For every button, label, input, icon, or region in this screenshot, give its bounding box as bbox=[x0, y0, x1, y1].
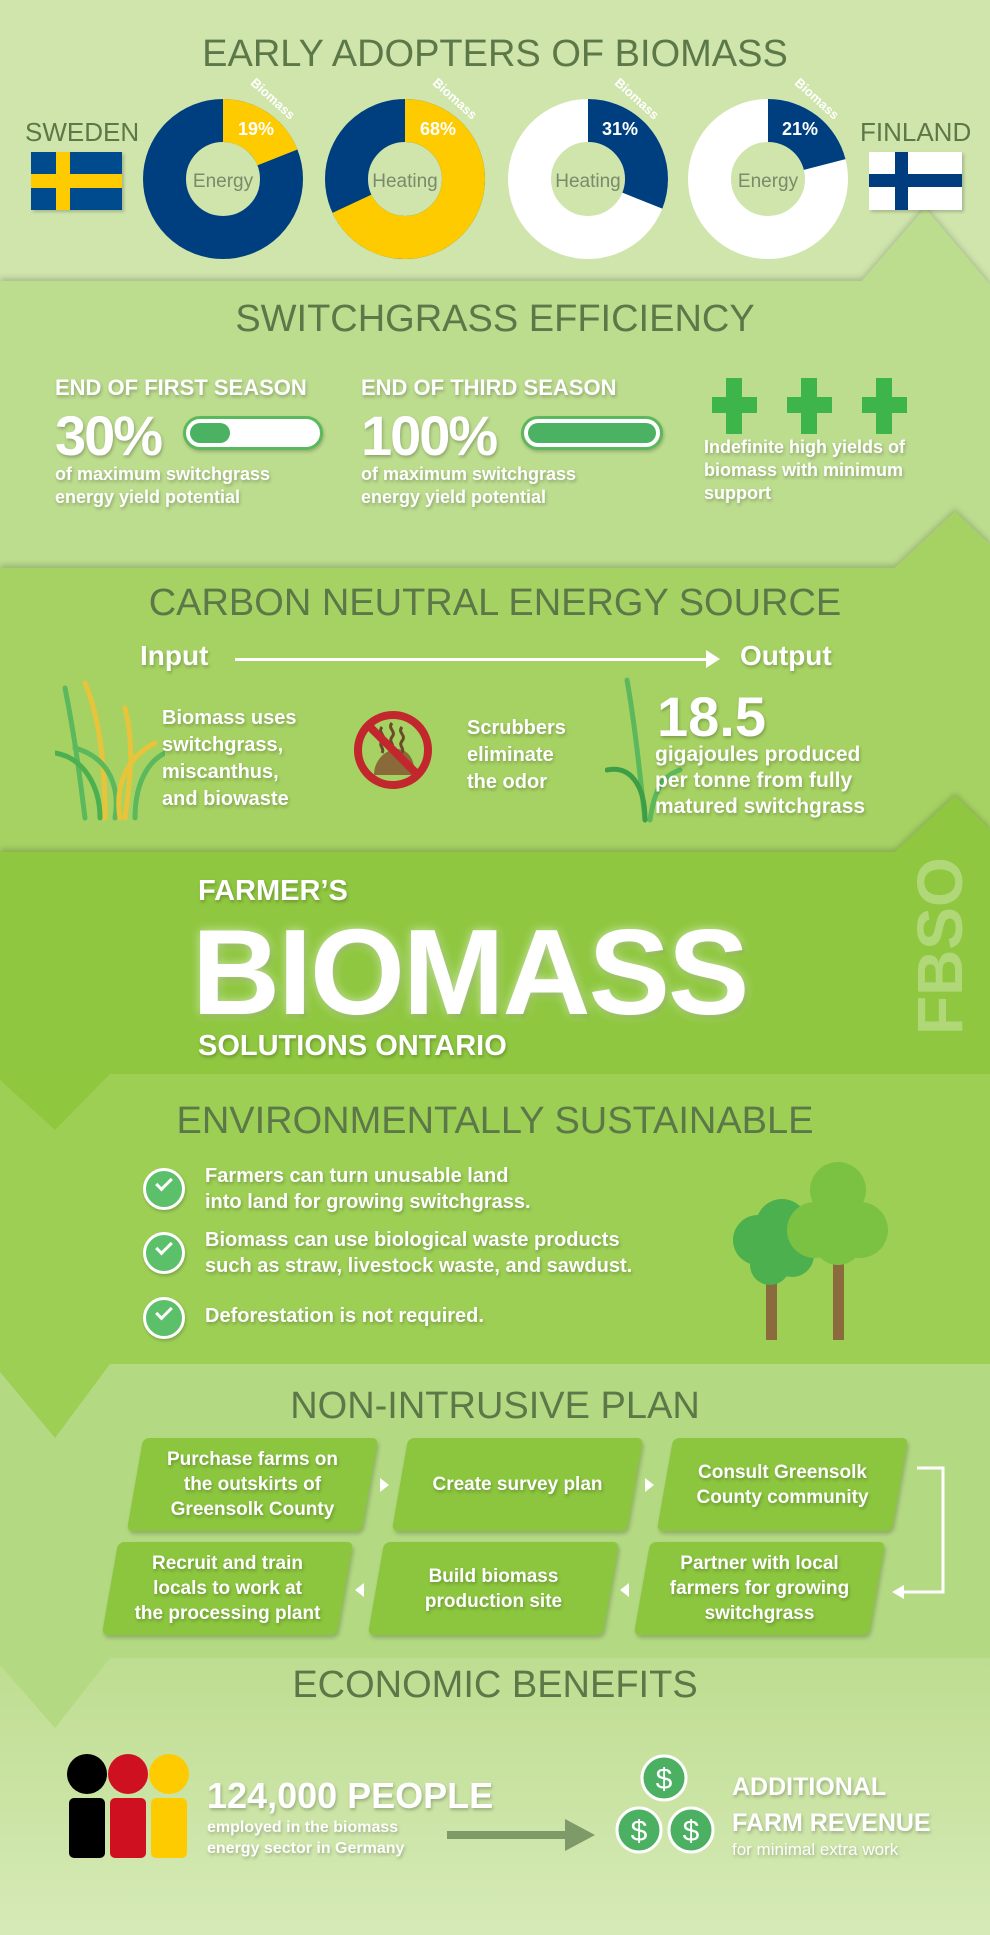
text: gigajoules: matured switchgrass bbox=[655, 795, 865, 818]
plan step 4: Partner with local bbox=[680, 1553, 839, 1574]
donut: sweden heating bbox=[346, 75, 480, 237]
stat: third season bbox=[361, 375, 666, 510]
arrow 1 bbox=[380, 1478, 389, 1492]
banner: farmer's biomass: SOLUTIONS ONTARIO bbox=[198, 1030, 507, 1062]
text: indefinite yields: support bbox=[704, 483, 771, 503]
plan step 2 bbox=[392, 1438, 643, 1531]
icon: trees bbox=[733, 1162, 888, 1340]
text: indefinite yields: biomass with minimum bbox=[704, 460, 903, 480]
banner: farmer's biomass: FARMER’S bbox=[198, 875, 348, 907]
text: gigajoules: per tonne from fully bbox=[655, 769, 852, 792]
text: biomass uses: Biomass uses bbox=[162, 707, 297, 729]
text: biomass uses: switchgrass, bbox=[162, 734, 283, 756]
plan step 5: Build biomass bbox=[429, 1566, 558, 1586]
plan step 6: locals to work at bbox=[153, 1578, 302, 1599]
check item 1 bbox=[142, 1165, 532, 1216]
check item 2: such as straw, livestock waste, and sawdust. bbox=[205, 1255, 632, 1277]
check item 1: Farmers can turn unusable land bbox=[205, 1165, 508, 1187]
text: scrubbers: Scrubbers bbox=[467, 717, 566, 739]
donut: finland heating: Heating bbox=[555, 171, 621, 192]
plan step 6: Recruit and train bbox=[152, 1553, 303, 1574]
donut: sweden energy: 19% bbox=[238, 119, 274, 139]
check item 1: into land for growing switchgrass. bbox=[205, 1191, 531, 1213]
icon: grass small bbox=[605, 678, 682, 822]
stat: 124,000 people: employed in the biomass bbox=[207, 1819, 398, 1836]
arrow: people to revenue bbox=[447, 1819, 595, 1851]
plan step 3 bbox=[657, 1438, 908, 1531]
donut: sweden heating: 68% bbox=[420, 119, 456, 139]
icon: no odor bbox=[354, 711, 432, 789]
flow: input to output: Output bbox=[740, 640, 832, 671]
icon: coins: $ bbox=[683, 1815, 700, 1848]
banner: farmer's biomass: BIOMASS bbox=[192, 904, 747, 1040]
icon: people bbox=[67, 1754, 189, 1858]
text: biomass uses: and biowaste bbox=[162, 788, 289, 810]
plan step 5: production site bbox=[425, 1590, 562, 1612]
stat: third season: energy yield potential bbox=[361, 487, 546, 507]
plan step 1: Purchase farms on bbox=[167, 1449, 338, 1470]
stat: first season bbox=[55, 375, 326, 510]
stat: 124,000 people: energy sector in Germany bbox=[207, 1840, 404, 1857]
donut: finland energy bbox=[710, 75, 842, 237]
check item 3: Deforestation is not required. bbox=[205, 1305, 484, 1327]
icon: plus signs bbox=[712, 378, 907, 434]
title: non-intrusive plan: NON-INTRUSIVE PLAN bbox=[290, 1385, 700, 1427]
stat: 124,000 people: 124,000 PEOPLE bbox=[207, 1775, 493, 1816]
flow: input to output: Input bbox=[140, 640, 208, 671]
donut: sweden energy: Biomass bbox=[248, 75, 298, 122]
text: scrubbers: eliminate bbox=[467, 744, 554, 766]
title: early adopters: EARLY ADOPTERS OF BIOMASS bbox=[202, 33, 788, 75]
text: additional revenue: for minimal extra work bbox=[732, 1840, 898, 1859]
donut: sweden heating: Biomass bbox=[430, 75, 480, 122]
text: additional revenue: FARM REVENUE bbox=[732, 1809, 931, 1837]
stat: 124,000 people bbox=[207, 1775, 494, 1860]
plan step 2: Create survey plan bbox=[432, 1474, 603, 1495]
title: economic benefits: ECONOMIC BENEFITS bbox=[292, 1664, 698, 1706]
plan step 5 bbox=[368, 1542, 619, 1635]
text: additional revenue: ADDITIONAL bbox=[732, 1773, 886, 1801]
label: sweden: SWEDEN bbox=[25, 117, 139, 147]
donut: sweden energy: Energy bbox=[193, 171, 254, 192]
text: gigajoules: gigajoules produced bbox=[655, 743, 860, 766]
arrow 5 bbox=[355, 1583, 364, 1597]
icon: grass bbox=[55, 680, 165, 820]
check item 2 bbox=[142, 1229, 633, 1278]
icon: coins: $ bbox=[656, 1763, 673, 1796]
plan step 4: switchgrass bbox=[705, 1603, 814, 1624]
progress bar 100% bbox=[521, 416, 663, 450]
progress bar 30% bbox=[183, 416, 323, 450]
flag: sweden bbox=[31, 152, 122, 210]
flag: finland bbox=[869, 152, 962, 210]
text: biomass uses: miscanthus, bbox=[162, 761, 279, 783]
donut: finland heating bbox=[530, 75, 662, 237]
donut: sweden energy bbox=[164, 75, 298, 237]
text: scrubbers bbox=[467, 717, 568, 793]
donut: finland energy: Biomass bbox=[792, 75, 842, 122]
logo text: FBSO: FBSO bbox=[904, 857, 976, 1035]
donut: finland energy: 21% bbox=[782, 119, 818, 139]
title: carbon neutral: CARBON NEUTRAL ENERGY SOURCE bbox=[149, 582, 841, 624]
label: finland: FINLAND bbox=[860, 117, 971, 147]
plan step 4 bbox=[634, 1542, 885, 1635]
stat: 18.5: 18.5 bbox=[657, 685, 766, 748]
text: additional revenue bbox=[732, 1773, 932, 1859]
arrow 4 bbox=[620, 1583, 629, 1597]
connector bracket bbox=[892, 1466, 944, 1599]
plan step 1 bbox=[127, 1438, 378, 1531]
icon: coins bbox=[616, 1754, 714, 1854]
title: environmentally sustainable: ENVIRONMENTALLY SUSTAINABLE bbox=[176, 1100, 814, 1142]
stat: first season: of maximum switchgrass bbox=[55, 464, 270, 484]
plan step 1: the outskirts of bbox=[184, 1474, 321, 1495]
plan step 6: the processing plant bbox=[135, 1603, 320, 1624]
check item 3 bbox=[142, 1297, 484, 1342]
donut: sweden heating: Heating bbox=[372, 171, 438, 192]
plan step 3: County community bbox=[696, 1486, 869, 1508]
stat: third season: of maximum switchgrass bbox=[361, 464, 576, 484]
text: indefinite yields bbox=[704, 437, 907, 506]
text: biomass uses bbox=[162, 707, 298, 810]
stat: first season: energy yield potential bbox=[55, 487, 240, 507]
list: sustainability points bbox=[142, 1165, 633, 1342]
plan step 1: Greensolk County bbox=[171, 1499, 334, 1520]
stat: third season: END OF THIRD SEASON bbox=[361, 375, 616, 400]
donut: finland heating: Biomass bbox=[612, 75, 662, 122]
stat: first season: 30% bbox=[55, 404, 161, 467]
text: scrubbers: the odor bbox=[467, 771, 547, 793]
plan step 3: Consult Greensolk bbox=[698, 1462, 867, 1482]
stat: third season: 100% bbox=[361, 404, 496, 467]
check item 2: Biomass can use biological waste products bbox=[205, 1229, 620, 1251]
stat: first season: END OF FIRST SEASON bbox=[55, 375, 307, 400]
title: switchgrass efficiency: SWITCHGRASS EFFICIENCY bbox=[235, 298, 755, 340]
plan step 4: farmers for growing bbox=[670, 1578, 849, 1599]
donut: finland energy: Energy bbox=[738, 171, 799, 192]
plan step 6 bbox=[102, 1542, 353, 1635]
arrow 2 bbox=[645, 1478, 654, 1492]
donut charts bbox=[143, 75, 848, 259]
flow: input to output bbox=[140, 640, 834, 674]
text: gigajoules bbox=[655, 743, 866, 821]
text: indefinite yields: Indefinite high yields of bbox=[704, 437, 905, 457]
donut: finland heating: 31% bbox=[602, 119, 638, 139]
icon: coins: $ bbox=[631, 1815, 648, 1848]
